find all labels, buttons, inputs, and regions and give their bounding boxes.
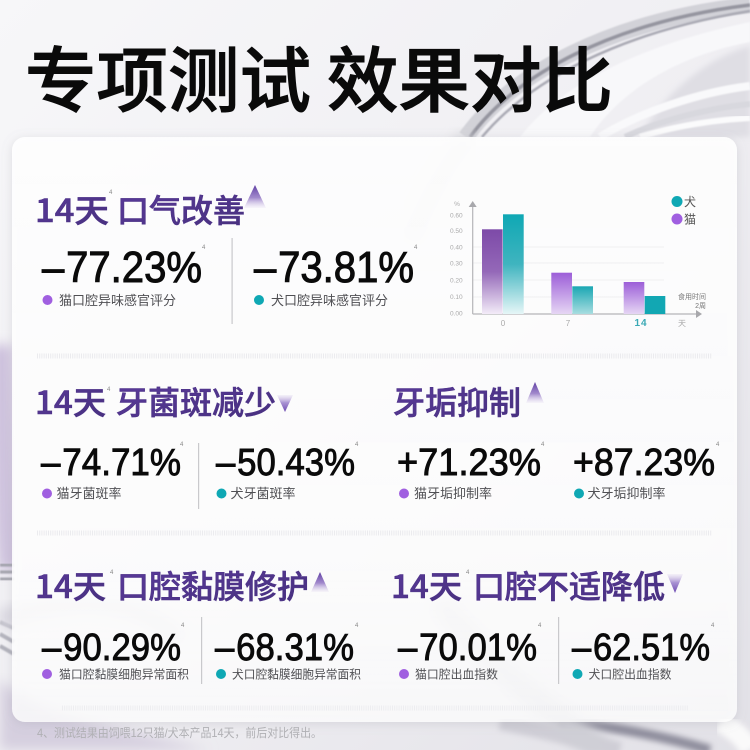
stat: dog plaque bbox=[216, 442, 359, 502]
bar chart bbox=[450, 195, 706, 329]
bar chart: 14 bbox=[634, 318, 648, 329]
bar chart: % bbox=[454, 201, 460, 208]
stat: cat breath: –77.23% bbox=[42, 243, 202, 292]
heading: mucosa: 口腔黏膜修护 bbox=[117, 562, 309, 608]
stat: cat tartar: 4 bbox=[541, 442, 545, 448]
stat: dog tartar: 犬牙垢抑制率 bbox=[588, 483, 666, 502]
heading: plaque: 4 bbox=[107, 387, 111, 393]
stat: dog mucosa: 4 bbox=[355, 623, 359, 629]
stat: dog breath: 4 bbox=[414, 245, 418, 251]
bar chart: 2周 bbox=[695, 302, 706, 310]
stat: cat mucosa: 猫口腔黏膜细胞异常面积 bbox=[59, 666, 189, 682]
bar chart: 0.60 bbox=[450, 212, 463, 220]
heading: breath bbox=[35, 185, 266, 232]
stat: dog mucosa: –68.31% bbox=[215, 627, 354, 669]
heading: mucosa: 4 bbox=[110, 570, 114, 576]
heading: tartar: 牙垢抑制 bbox=[393, 378, 521, 424]
heading: discomfort: 口腔不适降低 bbox=[473, 562, 665, 608]
title: 专项测试 效果对比 bbox=[25, 25, 613, 127]
stat: dog mucosa: 犬口腔黏膜细胞异常面积 bbox=[232, 666, 361, 682]
stat: dog mucosa bbox=[215, 623, 361, 682]
stat: cat breath: 猫口腔异味感官评分 bbox=[59, 290, 176, 309]
heading: discomfort: 14天 bbox=[391, 562, 462, 608]
bar chart: 天 bbox=[678, 319, 686, 328]
heading: breath: 4 bbox=[109, 190, 113, 196]
heading: breath: 口气改善 bbox=[117, 186, 245, 232]
stat: dog tartar: +87.23% bbox=[573, 442, 715, 484]
bar chart: 0.50 bbox=[450, 228, 463, 235]
bar chart: 0.40 bbox=[450, 244, 463, 252]
stat: cat plaque: 4 bbox=[180, 442, 184, 448]
stat: cat bleeding: 4 bbox=[538, 623, 542, 629]
heading: discomfort bbox=[391, 562, 683, 608]
bar chart: 0.10 bbox=[450, 294, 463, 301]
stat: cat mucosa: –90.29% bbox=[42, 627, 181, 669]
bar chart: 0 bbox=[501, 319, 506, 328]
panel: card bbox=[12, 137, 737, 722]
stat: cat tartar: 猫牙垢抑制率 bbox=[414, 483, 492, 502]
stat: dog plaque: –50.43% bbox=[216, 442, 355, 484]
bar chart: 0.30 bbox=[450, 260, 463, 268]
stat: dog plaque: 4 bbox=[355, 442, 359, 448]
stat: cat plaque: 猫牙菌斑率 bbox=[56, 483, 122, 502]
stat: dog breath: 犬口腔异味感官评分 bbox=[271, 290, 388, 309]
stat: dog tartar bbox=[573, 442, 720, 502]
heading: plaque: 14天 bbox=[35, 378, 106, 424]
stat: cat bleeding bbox=[398, 623, 542, 682]
stat: dog bleeding: 4 bbox=[711, 623, 715, 629]
footnote: 4、测试结果由饲喂12只猫/犬本产品14天，前后对比得出。 bbox=[37, 725, 322, 740]
stat: dog bleeding bbox=[572, 623, 715, 682]
bar chart: 食用时间 bbox=[678, 292, 706, 301]
stat: dog breath: –73.81% bbox=[254, 243, 414, 292]
stat: dog plaque: 犬牙菌斑率 bbox=[230, 483, 296, 502]
stat: dog bleeding: 犬口腔出血指数 bbox=[588, 666, 672, 682]
stat: cat mucosa: 4 bbox=[181, 623, 185, 629]
stat: cat tartar bbox=[397, 442, 545, 502]
heading: plaque bbox=[35, 378, 293, 424]
stat: cat plaque bbox=[41, 442, 184, 502]
bar chart: 0.20 bbox=[450, 278, 463, 284]
stat: cat breath: 4 bbox=[202, 245, 206, 251]
stat: cat bleeding: –70.01% bbox=[398, 627, 537, 669]
legend: 犬 bbox=[684, 195, 696, 209]
heading: mucosa bbox=[35, 562, 329, 608]
heading: breath: 14天 bbox=[35, 186, 109, 232]
legend: 猫 bbox=[684, 212, 696, 226]
stat: cat mucosa bbox=[42, 623, 189, 682]
stat: cat tartar: +71.23% bbox=[397, 442, 541, 484]
stat: dog tartar: 4 bbox=[716, 442, 720, 448]
heading: discomfort: 4 bbox=[466, 570, 470, 576]
bar chart: 7 bbox=[566, 319, 571, 328]
heading: plaque: 牙菌斑减少 bbox=[116, 378, 276, 424]
stat: cat bleeding: 猫口腔出血指数 bbox=[415, 666, 498, 682]
legend bbox=[672, 195, 696, 226]
stat: dog bleeding: –62.51% bbox=[572, 627, 710, 669]
heading: mucosa: 14天 bbox=[35, 562, 106, 608]
bar chart: 0.00 bbox=[450, 310, 463, 318]
stat: cat plaque: –74.71% bbox=[41, 442, 181, 484]
y axis bbox=[472, 204, 474, 314]
